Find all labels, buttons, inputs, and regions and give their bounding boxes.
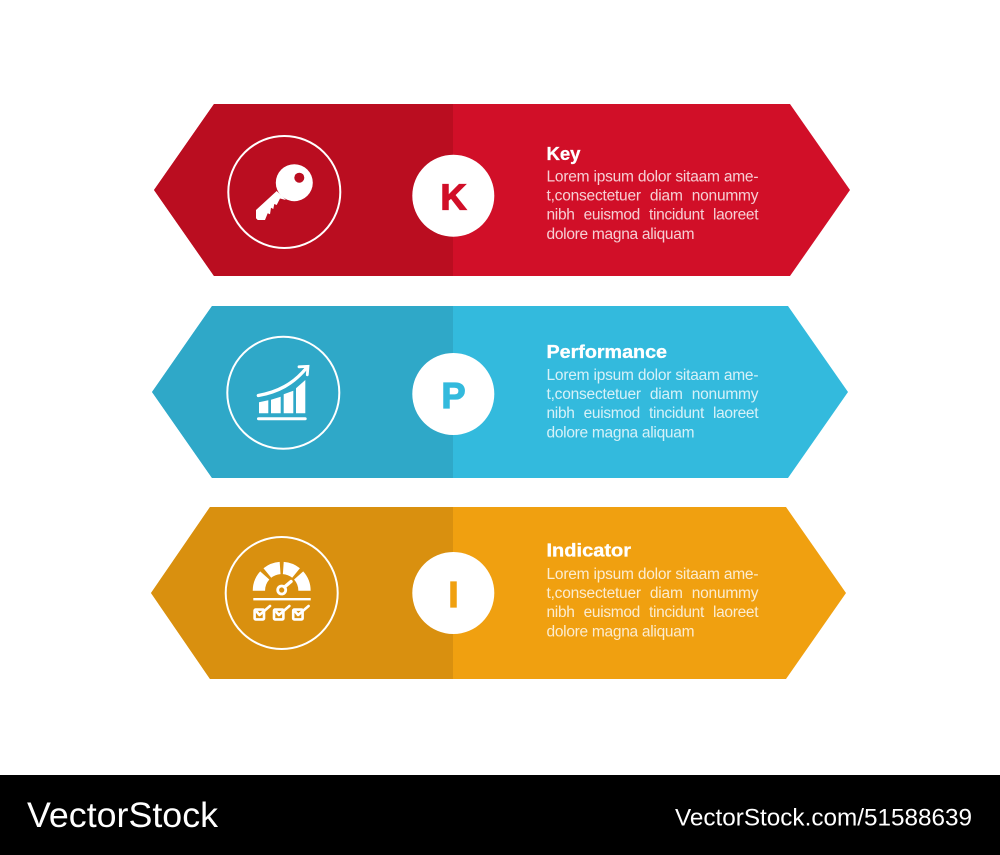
letter badge: I: I — [448, 574, 459, 615]
panel left shade: dark red — [154, 104, 453, 276]
body text: Indicator: dolore magna aliquam — [546, 624, 694, 640]
panel background: red hexagon — [154, 104, 850, 276]
letter badge: K — [412, 155, 494, 237]
body text: Performance: Lorem ipsum dolor sitaam ame- — [546, 367, 758, 384]
letter badge: K: K — [440, 176, 466, 218]
panel: Key — [154, 104, 850, 276]
body text: Indicator: Lorem ipsum dolor sitaam ame- — [546, 566, 758, 583]
letter badge: P — [412, 353, 494, 435]
heading: Indicator: Indicator — [546, 540, 631, 560]
body text: Performance: dolore magna aliquam — [546, 424, 694, 442]
letter badge: I — [412, 552, 494, 634]
body text: Key: Lorem ipsum dolor sitaam ame- — [546, 168, 758, 186]
panel background: blue hexagon — [152, 306, 848, 478]
body text: Key — [546, 168, 759, 243]
panel left shade: dark amber — [151, 507, 453, 679]
icon: growth chart — [227, 337, 339, 449]
body text: Indicator: t,consectetuer diam nonummy — [546, 585, 759, 602]
panel left shade: dark blue — [152, 306, 453, 478]
footer logo text: VectorStock — [27, 796, 219, 835]
panel: Indicator — [151, 507, 846, 679]
body text: Key: t,consectetuer diam nonummy — [546, 188, 759, 204]
letter badge: P: P — [441, 375, 466, 416]
footer bar — [0, 775, 1000, 855]
icon: key — [228, 136, 340, 248]
footer url text: VectorStock.com/51588639 — [675, 804, 972, 832]
icon: gauge with checkboxes — [226, 537, 338, 649]
body text: Performance: t,consectetuer diam nonummy — [546, 386, 759, 403]
body text: Performance — [546, 367, 759, 442]
panel background: amber hexagon — [151, 507, 846, 679]
body text: Indicator: nibh euismod tincidunt laoreet — [546, 604, 759, 621]
body text: Key: dolore magna aliquam — [546, 226, 694, 243]
body text: Indicator — [546, 566, 759, 640]
body text: Performance: nibh euismod tincidunt laoreet — [546, 405, 759, 422]
heading: Performance: Performance — [546, 342, 667, 362]
panel: Performance — [152, 306, 848, 478]
body text: Key: nibh euismod tincidunt laoreet — [546, 206, 759, 224]
heading: Key: Key — [546, 144, 580, 164]
